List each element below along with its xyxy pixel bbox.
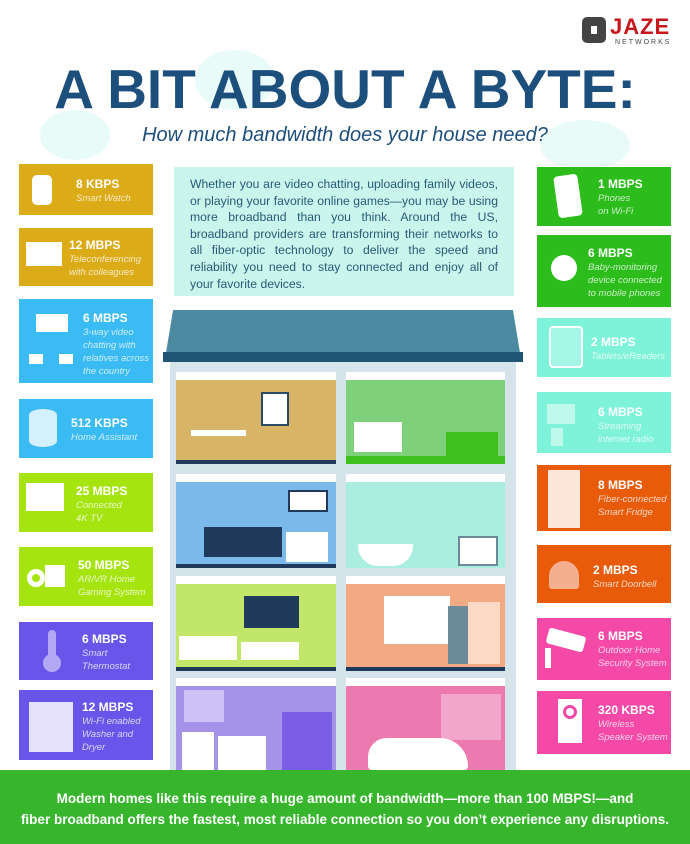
- box: speaker: Wireless: [598, 719, 634, 730]
- room: nursery: [346, 372, 505, 464]
- box: security: Security System: [598, 658, 667, 669]
- box: 4K TV: 4K TV: [76, 513, 102, 524]
- room: office: [176, 372, 336, 464]
- box: thermostat: Smart: [82, 648, 107, 659]
- box: home assistant: Home Assistant: [71, 432, 137, 443]
- logo: JAZE: [610, 14, 670, 39]
- box: doorbell: Smart Doorbell: [593, 579, 656, 590]
- box: radio: internet radio: [598, 434, 653, 445]
- box: speaker: [537, 691, 671, 754]
- bottom banner: Modern homes like this require a huge amount of bandwidth—more than 100 MBPS!—and: [57, 791, 633, 806]
- box: washer: Washer and: [82, 729, 133, 740]
- bottom banner: fiber broadband offers the fastest, most reliable connection so you don’t experience any disruptions.: [21, 812, 669, 827]
- house illustration: [163, 310, 523, 770]
- walls: [170, 362, 516, 770]
- logo: NETWORKS: [615, 39, 671, 46]
- room: bedroom: [176, 474, 336, 568]
- box: speaker: Speaker System: [598, 732, 668, 743]
- box: video chat: relatives across: [83, 353, 149, 364]
- title: A BIT ABOUT A BYTE:: [54, 58, 636, 120]
- box: 4K TV: Connected: [76, 500, 122, 511]
- box: radio: [537, 392, 671, 453]
- intro text: Whether you are video chatting, uploading family videos, or playing your favorite online games—you may be using more broadband than you think. Around the US, broadband providers are transforming their networks to all fiber-optic technology to deliver the speed and reliability you need to stay connected and enjoy all of your favorite devices.: [190, 177, 498, 291]
- box: teleconferencing: with colleagues: [69, 267, 134, 278]
- box: fridge: [537, 465, 671, 531]
- room: bathroom: [346, 474, 505, 568]
- box: tablets: Tablets/eReaders: [591, 351, 665, 362]
- box: baby monitor: device connected: [588, 275, 662, 286]
- box: doorbell: 2 MBPS: [593, 563, 638, 577]
- box: AR/VR: 50 MBPS: [78, 558, 129, 572]
- box: smart watch: Smart Watch: [76, 193, 131, 204]
- box: AR/VR: AR/VR Home: [78, 574, 135, 585]
- box: video chat: chatting with: [83, 340, 136, 351]
- box: thermostat: 6 MBPS: [82, 632, 127, 646]
- box: teleconferencing: 12 MBPS: [69, 238, 120, 252]
- box: home assistant: 512 KBPS: [71, 416, 128, 430]
- box: video chat: 6 MBPS: [83, 311, 128, 325]
- box: washer: [19, 690, 153, 760]
- room: kitchen: [346, 576, 505, 671]
- box: fridge: Fiber-connected: [598, 494, 666, 505]
- box: teleconferencing: [19, 228, 153, 286]
- box: washer: Wi-Fi enabled: [82, 716, 141, 727]
- box: fridge: 8 MBPS: [598, 478, 643, 492]
- logo: [582, 14, 671, 46]
- box: fridge: Smart Fridge: [598, 507, 653, 518]
- box: video chat: [19, 299, 153, 383]
- roof: [166, 310, 520, 352]
- box: tablets: [537, 318, 671, 377]
- box: teleconferencing: Teleconferencing: [69, 254, 141, 265]
- box: baby monitor: to mobile phones: [588, 288, 660, 299]
- room: laundry: [176, 678, 336, 770]
- box: thermostat: Thermostat: [82, 661, 130, 672]
- panel: left devices: [19, 164, 153, 760]
- room: living: [176, 576, 336, 671]
- box: AR/VR: [19, 547, 153, 606]
- box: phones: on Wi-Fi: [598, 206, 633, 217]
- bottom banner: [0, 770, 690, 844]
- box: video chat: the country: [83, 366, 130, 377]
- box: doorbell: [537, 545, 671, 603]
- box: 4K TV: [19, 473, 153, 532]
- box: washer: 12 MBPS: [82, 700, 133, 714]
- box: baby monitor: [537, 235, 671, 307]
- box: radio: 6 MBPS: [598, 405, 643, 419]
- box: washer: Dryer: [82, 742, 105, 753]
- box: 4K TV: 25 MBPS: [76, 484, 127, 498]
- box: video chat: 3-way video: [83, 327, 134, 338]
- box: tablets: 2 MBPS: [591, 335, 636, 349]
- box: phones: 1 MBPS: [598, 177, 643, 191]
- box: smart watch: 8 KBPS: [76, 177, 119, 191]
- box: security: [537, 618, 671, 680]
- box: home assistant: [19, 399, 153, 458]
- box: security: 6 MBPS: [598, 629, 643, 643]
- box: baby monitor: Baby-monitoring: [588, 262, 657, 273]
- box: AR/VR: Gaming System: [78, 587, 146, 598]
- box: baby monitor: 6 MBPS: [588, 246, 633, 260]
- box: speaker: 320 KBPS: [598, 703, 655, 717]
- box: radio: Streaming: [598, 421, 641, 432]
- box: phones: [537, 167, 671, 226]
- panel: right devices: [537, 167, 671, 754]
- subtitle: How much bandwidth does your house need?: [142, 124, 548, 146]
- box: phones: Phones: [598, 193, 630, 204]
- box: smart watch: [19, 164, 153, 215]
- box: thermostat: [19, 622, 153, 680]
- box: security: Outdoor Home: [598, 645, 660, 656]
- room: garage: [346, 678, 505, 770]
